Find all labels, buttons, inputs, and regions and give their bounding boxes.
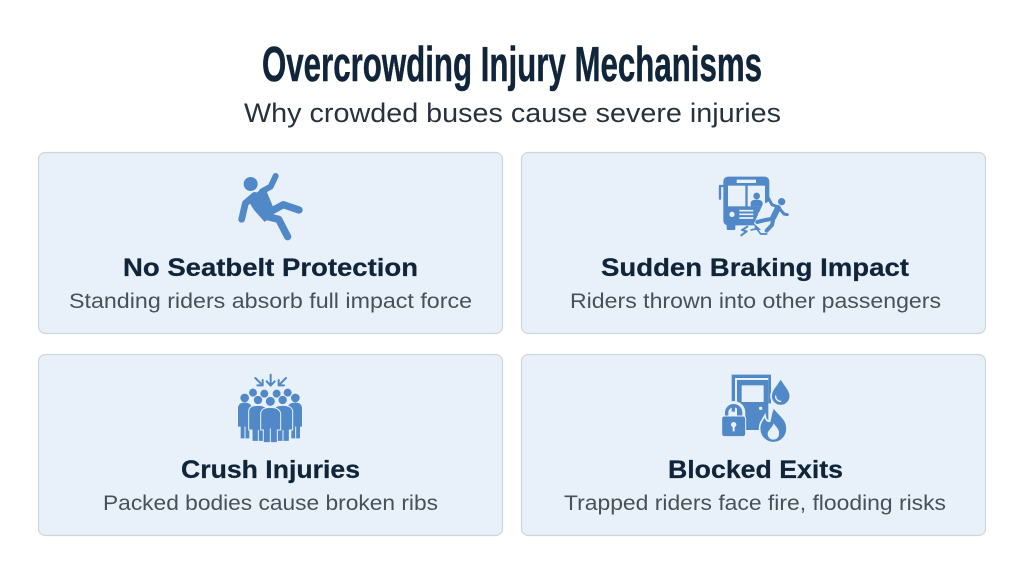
description: Riders thrown into other passengers <box>570 290 941 313</box>
description: Packed bodies cause broken ribs <box>103 492 438 515</box>
icon: bus with thrown rider <box>720 177 790 235</box>
icon: falling person <box>242 176 299 237</box>
heading: No Seatbelt Protection <box>123 254 418 282</box>
panel: crush injuries <box>38 354 502 536</box>
heading: Sudden Braking Impact <box>601 254 910 282</box>
heading: Blocked Exits <box>668 456 843 484</box>
heading: Crush Injuries <box>181 456 360 484</box>
title: Overcrowding Injury Mechanisms <box>262 38 762 92</box>
icon: crowd with inward arrows <box>238 375 302 443</box>
description: Trapped riders face fire, flooding risks <box>564 492 946 515</box>
panel: blocked exits <box>522 354 986 536</box>
panel: no seatbelt protection <box>38 152 502 334</box>
panel: sudden braking impact <box>522 152 986 334</box>
description: Standing riders absorb full impact force <box>69 290 472 313</box>
icon: locked door with water and fire <box>722 375 790 443</box>
subtitle: Why crowded buses cause severe injuries <box>244 98 781 128</box>
